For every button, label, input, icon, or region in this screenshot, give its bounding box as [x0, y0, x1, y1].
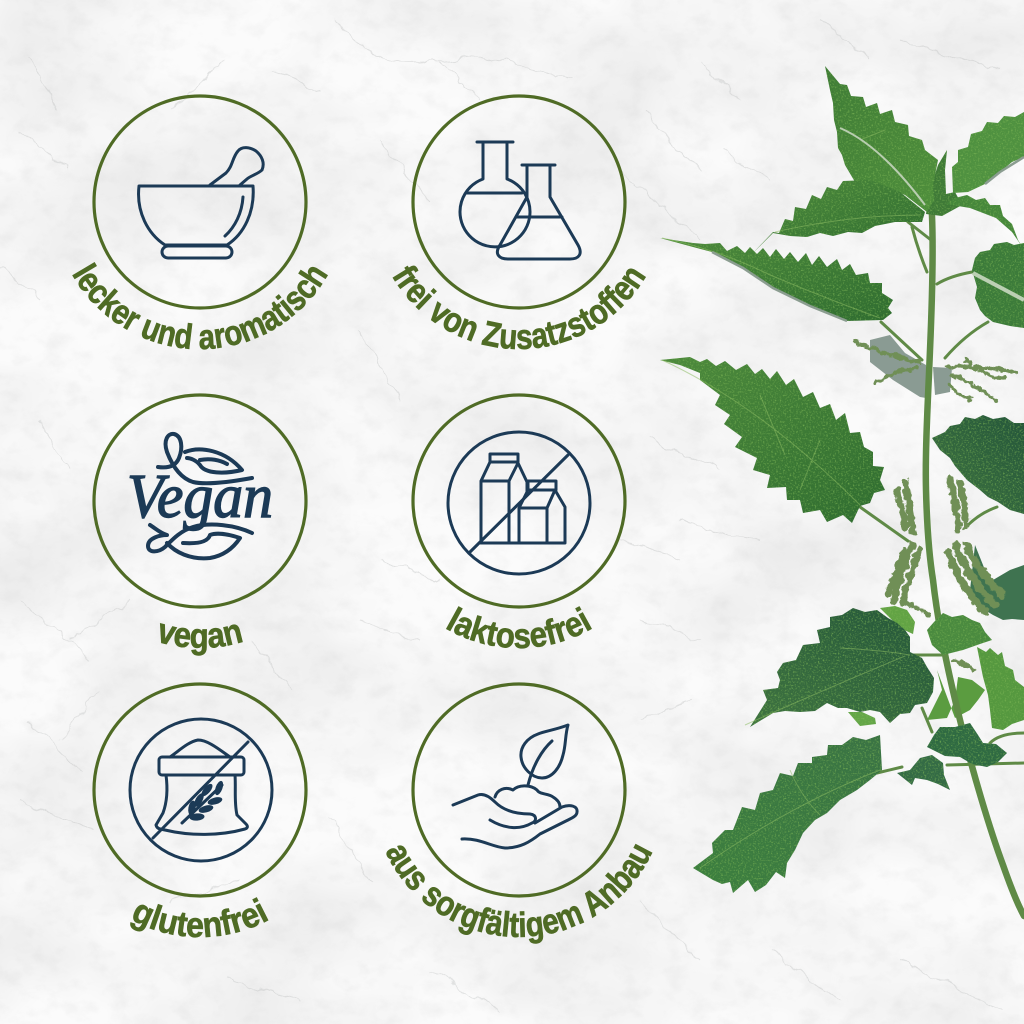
leaf: small lower stem right: [927, 723, 1007, 767]
ring: [413, 96, 625, 308]
leaf: small light under dark leaf: [848, 712, 876, 726]
panel: aus sorgfältigem Anbau: [386, 682, 652, 944]
nettle plant: [660, 66, 1024, 916]
icon: mortar and pestle: [139, 148, 263, 258]
label: laktosefrei: [446, 606, 592, 649]
flower clusters: [852, 340, 1017, 670]
leaf: lower centre dark: [750, 608, 934, 727]
leaf: grey underside right of stem: [933, 367, 952, 395]
label: lecker und aromatisch: [72, 262, 328, 350]
leaf: light behind lower stem: [927, 670, 985, 720]
leaf: far right light: [977, 647, 1024, 730]
leaf: small right top: [946, 195, 1023, 248]
leaf: large middle left: [660, 357, 885, 523]
leaf: small lower stem left: [897, 755, 950, 790]
leaf: lower large: [693, 735, 882, 893]
label: frei von Zusatzstoffen: [392, 266, 646, 350]
icon: vegan lettering with leaves: Vegan: [127, 463, 273, 531]
label: glutenfrei: [130, 897, 268, 938]
panel: frei von Zusatzstoffen: [392, 94, 646, 350]
leaf: centre right small: [927, 613, 992, 655]
icon: vegan lettering with leaves: [127, 434, 273, 558]
icon: hand with seedling: [453, 725, 577, 848]
panel: glutenfrei: [92, 682, 308, 938]
leaf: long left: [660, 238, 893, 321]
leaf: light above dark leaf: [880, 606, 915, 634]
leaf: top upright: [825, 66, 938, 212]
ring: [94, 395, 306, 607]
ring: [94, 684, 306, 896]
label: vegan: [160, 623, 243, 656]
leaf: right lower grey-green: [970, 545, 1024, 620]
leaf: top left: [752, 180, 925, 254]
icon: crossed out milk cartons: [448, 432, 590, 574]
leaf bud at stem tip: [926, 150, 962, 216]
panel: vegan: [92, 393, 308, 656]
ring: [413, 395, 625, 607]
panel: laktosefrei: [411, 393, 627, 649]
leaf: right middle dark: [932, 415, 1024, 514]
panel: lecker und aromatisch: [72, 94, 328, 350]
icon: crossed out flour sack: [130, 719, 272, 861]
ring: [94, 96, 306, 308]
leaf: right upper: [972, 242, 1024, 328]
plant stem and petioles: [860, 190, 1024, 916]
icon: lab flasks: [460, 142, 580, 259]
leaf veins: [662, 128, 1024, 868]
leaf: grey underside left of stem: [870, 335, 926, 398]
leaf: top right: [952, 112, 1024, 193]
label: aus sorgfältigem Anbau: [386, 844, 652, 944]
ring: [413, 684, 625, 896]
